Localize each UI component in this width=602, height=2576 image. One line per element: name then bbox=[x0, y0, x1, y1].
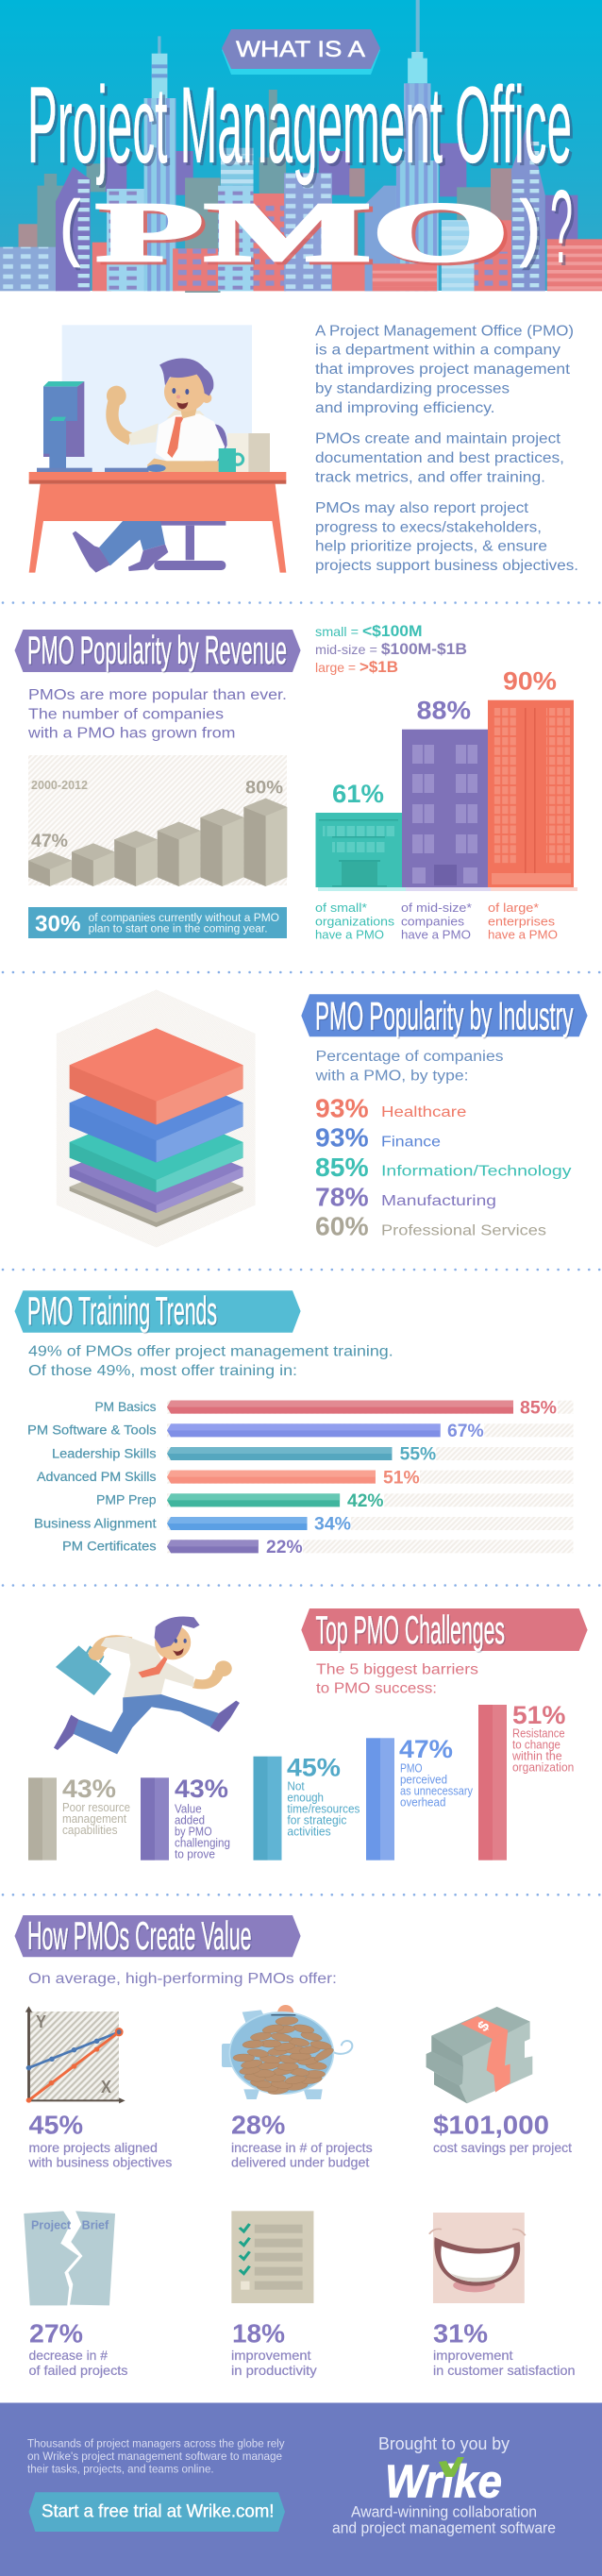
row: manufacturing: 78% bbox=[315, 1182, 369, 1211]
challenge: value added: added bbox=[175, 1813, 205, 1827]
challenge: unnecessary overhead: overhead bbox=[400, 1795, 445, 1809]
stat: 45% more projects aligned: with business objectives bbox=[27, 2155, 172, 2170]
challenge: value added: by PMO bbox=[175, 1825, 212, 1838]
icon: torn project brief: Project bbox=[31, 2219, 72, 2232]
stat: 31% customer satisfaction: in customer satisfaction bbox=[433, 2363, 576, 2378]
button: start a free trial: Start a free trial at Wrike.com! bbox=[42, 2502, 274, 2522]
title: (PMO)? bbox=[60, 169, 573, 285]
challenge: not enough time: for strategic bbox=[287, 1814, 346, 1827]
stat: 27% failed projects: of failed projects bbox=[28, 2363, 128, 2378]
building: small 61% bbox=[315, 780, 409, 941]
tagline: Award-winning collaboration bbox=[351, 2504, 537, 2521]
stat: $101,000 savings: $101,000 bbox=[433, 2111, 549, 2140]
callout: 30%: 30% bbox=[35, 912, 81, 937]
bar chart: training topics: 42% bbox=[347, 1490, 383, 1511]
revenue intro text: The number of companies bbox=[28, 706, 224, 722]
footer description: on Wrike's project management software to manage bbox=[27, 2450, 282, 2463]
stat: 31% customer satisfaction: 31% bbox=[433, 2318, 488, 2348]
growth chart bbox=[28, 755, 287, 886]
row: manufacturing bbox=[315, 1182, 496, 1211]
intro text: documentation and best practices, bbox=[315, 450, 564, 466]
challenge: not enough time: activities bbox=[287, 1826, 331, 1839]
icon: torn project brief bbox=[24, 2211, 115, 2305]
icon: checklist bbox=[231, 2211, 313, 2303]
stat: 18% productivity bbox=[231, 2318, 317, 2378]
challenge: not enough time: 45% bbox=[287, 1753, 341, 1781]
footer description: their tasks, projects, and teams online. bbox=[27, 2462, 214, 2475]
brought to you by: Brought to you by bbox=[378, 2434, 510, 2453]
value intro text: On average, high-performing PMOs offer: bbox=[28, 1971, 337, 1987]
stat: 27% failed projects: decrease in # bbox=[28, 2348, 108, 2363]
row: manufacturing: Manufacturing bbox=[381, 1193, 496, 1209]
panel: how PMOs create value bbox=[15, 1913, 576, 2378]
stat: 45% more projects aligned: more projects aligned bbox=[28, 2140, 158, 2155]
stat: 28% under budget bbox=[231, 2111, 373, 2170]
challenge: not enough time bbox=[253, 1753, 360, 1860]
building: small 61%: 61% bbox=[332, 780, 384, 808]
footer description: Thousands of project managers across the globe rely bbox=[27, 2437, 285, 2450]
callout: 30% bbox=[28, 907, 287, 938]
challenge: poor resource management bbox=[28, 1775, 130, 1860]
panel: popularity by industry bbox=[57, 989, 588, 1248]
challenge: value added bbox=[141, 1775, 230, 1860]
building: small 61%: have a PMO bbox=[315, 927, 384, 941]
building: large 90% bbox=[488, 667, 577, 941]
footer description bbox=[27, 2437, 285, 2475]
challenge: not enough time: time/resources bbox=[287, 1803, 360, 1816]
button: start a free trial bbox=[28, 2492, 285, 2532]
size legend bbox=[315, 622, 467, 676]
stat: 28% under budget: delivered under budget bbox=[231, 2155, 369, 2170]
challenge: value added: 43% bbox=[175, 1775, 228, 1803]
intro text bbox=[315, 323, 578, 574]
size legend: large = >$1B bbox=[315, 658, 398, 676]
panel: what is a PMO intro bbox=[29, 323, 578, 574]
building: mid-size 88%: 88% bbox=[417, 697, 471, 725]
icon: stack of cash bbox=[426, 2007, 532, 2103]
building: large 90%: enterprises bbox=[488, 914, 556, 928]
tagline: and project management software bbox=[332, 2519, 556, 2536]
footer background bbox=[0, 2403, 602, 2576]
icon: stack of cash: $ bbox=[476, 2018, 493, 2035]
stat: 31% customer satisfaction: improvement bbox=[433, 2348, 513, 2363]
challenge: unnecessary overhead: as unnecessary bbox=[400, 1785, 474, 1798]
bar chart: training topics bbox=[27, 1397, 574, 1557]
bar chart: training topics: 22% bbox=[266, 1537, 303, 1557]
city skyline bbox=[0, 0, 602, 293]
challenge: poor resource management: capabilities bbox=[62, 1824, 117, 1837]
labels and values: Leadership Skills bbox=[52, 1445, 157, 1460]
intro text: by standardizing processes bbox=[315, 381, 510, 397]
icon: xy chart: Y bbox=[36, 2012, 46, 2031]
hero panel bbox=[0, 0, 602, 293]
growth chart: 80% bbox=[245, 779, 283, 799]
bar chart: training topics: 34% bbox=[314, 1514, 351, 1535]
stat: 18% productivity: in productivity bbox=[231, 2363, 317, 2378]
challenge: resistance to change: organization bbox=[512, 1760, 574, 1774]
stat: 27% failed projects bbox=[28, 2318, 128, 2378]
challenge: value added: Value bbox=[175, 1802, 202, 1815]
badge: what is a bbox=[222, 29, 380, 75]
challenge: poor resource management: Poor resource bbox=[62, 1801, 130, 1814]
labels and values: PM Software & Tools bbox=[27, 1423, 157, 1438]
stat: 45% more projects aligned bbox=[27, 2111, 172, 2170]
heading ribbon: PMO Training Trends bbox=[27, 1288, 217, 1333]
industry intro text: with a PMO, by type: bbox=[314, 1068, 468, 1084]
challenge: poor resource management: 43% bbox=[62, 1775, 116, 1803]
icon: piggy bank with coins bbox=[222, 2005, 352, 2099]
row: finance: 93% bbox=[315, 1123, 369, 1153]
revenue intro text: with a PMO has grown from bbox=[27, 726, 236, 742]
size legend: small = <$100M bbox=[315, 622, 423, 640]
stat: 27% failed projects: 27% bbox=[29, 2318, 83, 2348]
industry list bbox=[315, 1093, 572, 1241]
heading ribbon bbox=[15, 628, 301, 672]
row: professional services bbox=[315, 1212, 546, 1241]
challenge: unnecessary overhead: perceived bbox=[400, 1774, 447, 1787]
growth chart: 2000-2012 bbox=[31, 779, 88, 792]
challenge: unnecessary overhead: 47% bbox=[399, 1735, 453, 1763]
stat: 31% customer satisfaction bbox=[433, 2318, 576, 2378]
row: information/technology: 85% bbox=[315, 1153, 369, 1182]
stacked layers illustration bbox=[57, 989, 256, 1248]
building: small 61%: of small* bbox=[315, 901, 367, 915]
intro text: and improving efficiency. bbox=[315, 400, 494, 416]
intro text: PMOs may also report project bbox=[315, 500, 529, 516]
row: healthcare: Healthcare bbox=[381, 1104, 466, 1120]
intro text: progress to execs/stakeholders, bbox=[315, 519, 542, 535]
intro text: that improves project management bbox=[315, 362, 571, 378]
stat: 18% productivity: improvement bbox=[231, 2348, 311, 2363]
row: healthcare: 93% bbox=[315, 1093, 369, 1122]
callout: 30%: of companies currently without a PMO bbox=[89, 913, 279, 924]
panel: popularity by revenue bbox=[15, 622, 577, 941]
training intro text: 49% of PMOs offer project management training. bbox=[28, 1344, 393, 1360]
panel: footer bbox=[0, 2402, 602, 2576]
row: information/technology bbox=[315, 1153, 572, 1182]
challenges intro text: to PMO success: bbox=[316, 1681, 437, 1697]
challenge: poor resource management: management bbox=[62, 1812, 126, 1826]
industry intro text bbox=[314, 1049, 504, 1084]
challenge: not enough time: enough bbox=[287, 1792, 324, 1805]
challenge: resistance to change bbox=[478, 1701, 574, 1860]
intro text: track metrics, and offer training. bbox=[315, 469, 545, 485]
challenge: unnecessary overhead: PMO bbox=[400, 1762, 423, 1776]
building: large 90%: of large* bbox=[488, 901, 539, 915]
challenge: resistance to change: to change bbox=[512, 1738, 560, 1751]
heading ribbon bbox=[15, 1913, 301, 1958]
challenge: value added: challenging bbox=[175, 1836, 230, 1849]
building: mid-size 88%: companies bbox=[401, 914, 465, 928]
row: finance bbox=[315, 1123, 441, 1153]
stat: $101,000 savings: cost savings per project bbox=[433, 2140, 572, 2155]
stat: 45% more projects aligned: 45% bbox=[28, 2111, 83, 2140]
row: professional services: 60% bbox=[315, 1212, 369, 1241]
revenue intro text bbox=[27, 687, 287, 742]
panel: training trends bbox=[15, 1288, 574, 1557]
intro text: A Project Management Office (PMO) bbox=[315, 323, 574, 339]
row: information/technology: Information/Technology bbox=[381, 1164, 572, 1180]
intro text: is a department within a company bbox=[315, 343, 560, 359]
row: professional services: Professional Services bbox=[381, 1222, 546, 1238]
challenge: not enough time: Not bbox=[287, 1780, 305, 1793]
icon: xy chart bbox=[25, 2006, 125, 2103]
icon: xy chart: X bbox=[101, 2078, 111, 2096]
title: (PMO)?: PMO bbox=[95, 186, 510, 279]
size legend: mid-size = $100M-$1B bbox=[315, 640, 467, 658]
challenge: resistance to change: within the bbox=[511, 1749, 562, 1762]
growth chart: 47% bbox=[31, 832, 68, 851]
bar chart: training topics: 55% bbox=[400, 1444, 436, 1465]
stat: $101,000 savings bbox=[433, 2111, 572, 2155]
building: large 90%: 90% bbox=[503, 667, 557, 696]
building: large 90%: have a PMO bbox=[488, 927, 558, 941]
panel: top challenges bbox=[28, 1608, 588, 1860]
illustration: man at desk bbox=[29, 325, 286, 573]
training intro text: Of those 49%, most offer training in: bbox=[28, 1363, 297, 1379]
hero background bbox=[0, 0, 602, 291]
labels and values: Business Alignment bbox=[34, 1515, 157, 1530]
icon: smile bbox=[429, 2213, 526, 2303]
building: mid-size 88%: have a PMO bbox=[401, 927, 471, 941]
challenge: value added: to prove bbox=[175, 1847, 215, 1860]
challenge: unnecessary overhead bbox=[366, 1735, 474, 1860]
icon: torn project brief: Brief bbox=[82, 2219, 109, 2232]
intro text: PMOs create and maintain project bbox=[315, 431, 561, 447]
labels and values bbox=[27, 1399, 157, 1554]
labels and values: Advanced PM Skills bbox=[37, 1469, 157, 1484]
building: mid-size 88% bbox=[401, 697, 493, 941]
revenue intro text: PMOs are more popular than ever. bbox=[28, 687, 287, 703]
building: mid-size 88%: of mid-size* bbox=[401, 901, 472, 915]
bar chart: training topics: 51% bbox=[383, 1467, 420, 1488]
labels and values: PM Certificates bbox=[62, 1539, 157, 1554]
heading ribbon: How PMOs Create Value bbox=[27, 1913, 251, 1958]
row: finance: Finance bbox=[381, 1134, 441, 1150]
heading ribbon: PMO Popularity by Revenue bbox=[27, 628, 287, 672]
badge: what is a: WHAT IS A bbox=[236, 37, 366, 62]
row: healthcare bbox=[315, 1093, 466, 1122]
title: (PMO)?: ) bbox=[521, 187, 540, 267]
challenge: resistance to change: Resistance bbox=[512, 1726, 565, 1740]
title: (PMO)?: ( bbox=[60, 187, 79, 267]
stat: 28% under budget: 28% bbox=[231, 2111, 285, 2140]
stat: 28% under budget: increase in # of projects bbox=[231, 2140, 373, 2155]
tagline bbox=[332, 2504, 556, 2536]
callout: 30%: plan to start one in the coming year. bbox=[89, 924, 268, 935]
intro text: help prioritize projects, & ensure bbox=[315, 539, 547, 555]
stat: 18% productivity: 18% bbox=[232, 2318, 285, 2348]
bar chart: training topics: 85% bbox=[520, 1397, 557, 1418]
challenges intro text bbox=[316, 1661, 478, 1697]
building: small 61%: organizations bbox=[315, 914, 395, 928]
labels and values: PMP Prep bbox=[96, 1492, 157, 1507]
bar chart: training topics: 67% bbox=[447, 1421, 484, 1441]
logo: Wrike: Wrike bbox=[385, 2457, 502, 2508]
illustration: running man bbox=[54, 1616, 240, 1754]
industry intro text: Percentage of companies bbox=[315, 1049, 504, 1065]
labels and values: PM Basics bbox=[94, 1399, 157, 1414]
challenge: resistance to change: 51% bbox=[512, 1701, 565, 1729]
training intro text bbox=[28, 1344, 393, 1379]
challenges intro text: The 5 biggest barriers bbox=[316, 1661, 478, 1677]
intro text: projects support business objectives. bbox=[315, 558, 578, 574]
